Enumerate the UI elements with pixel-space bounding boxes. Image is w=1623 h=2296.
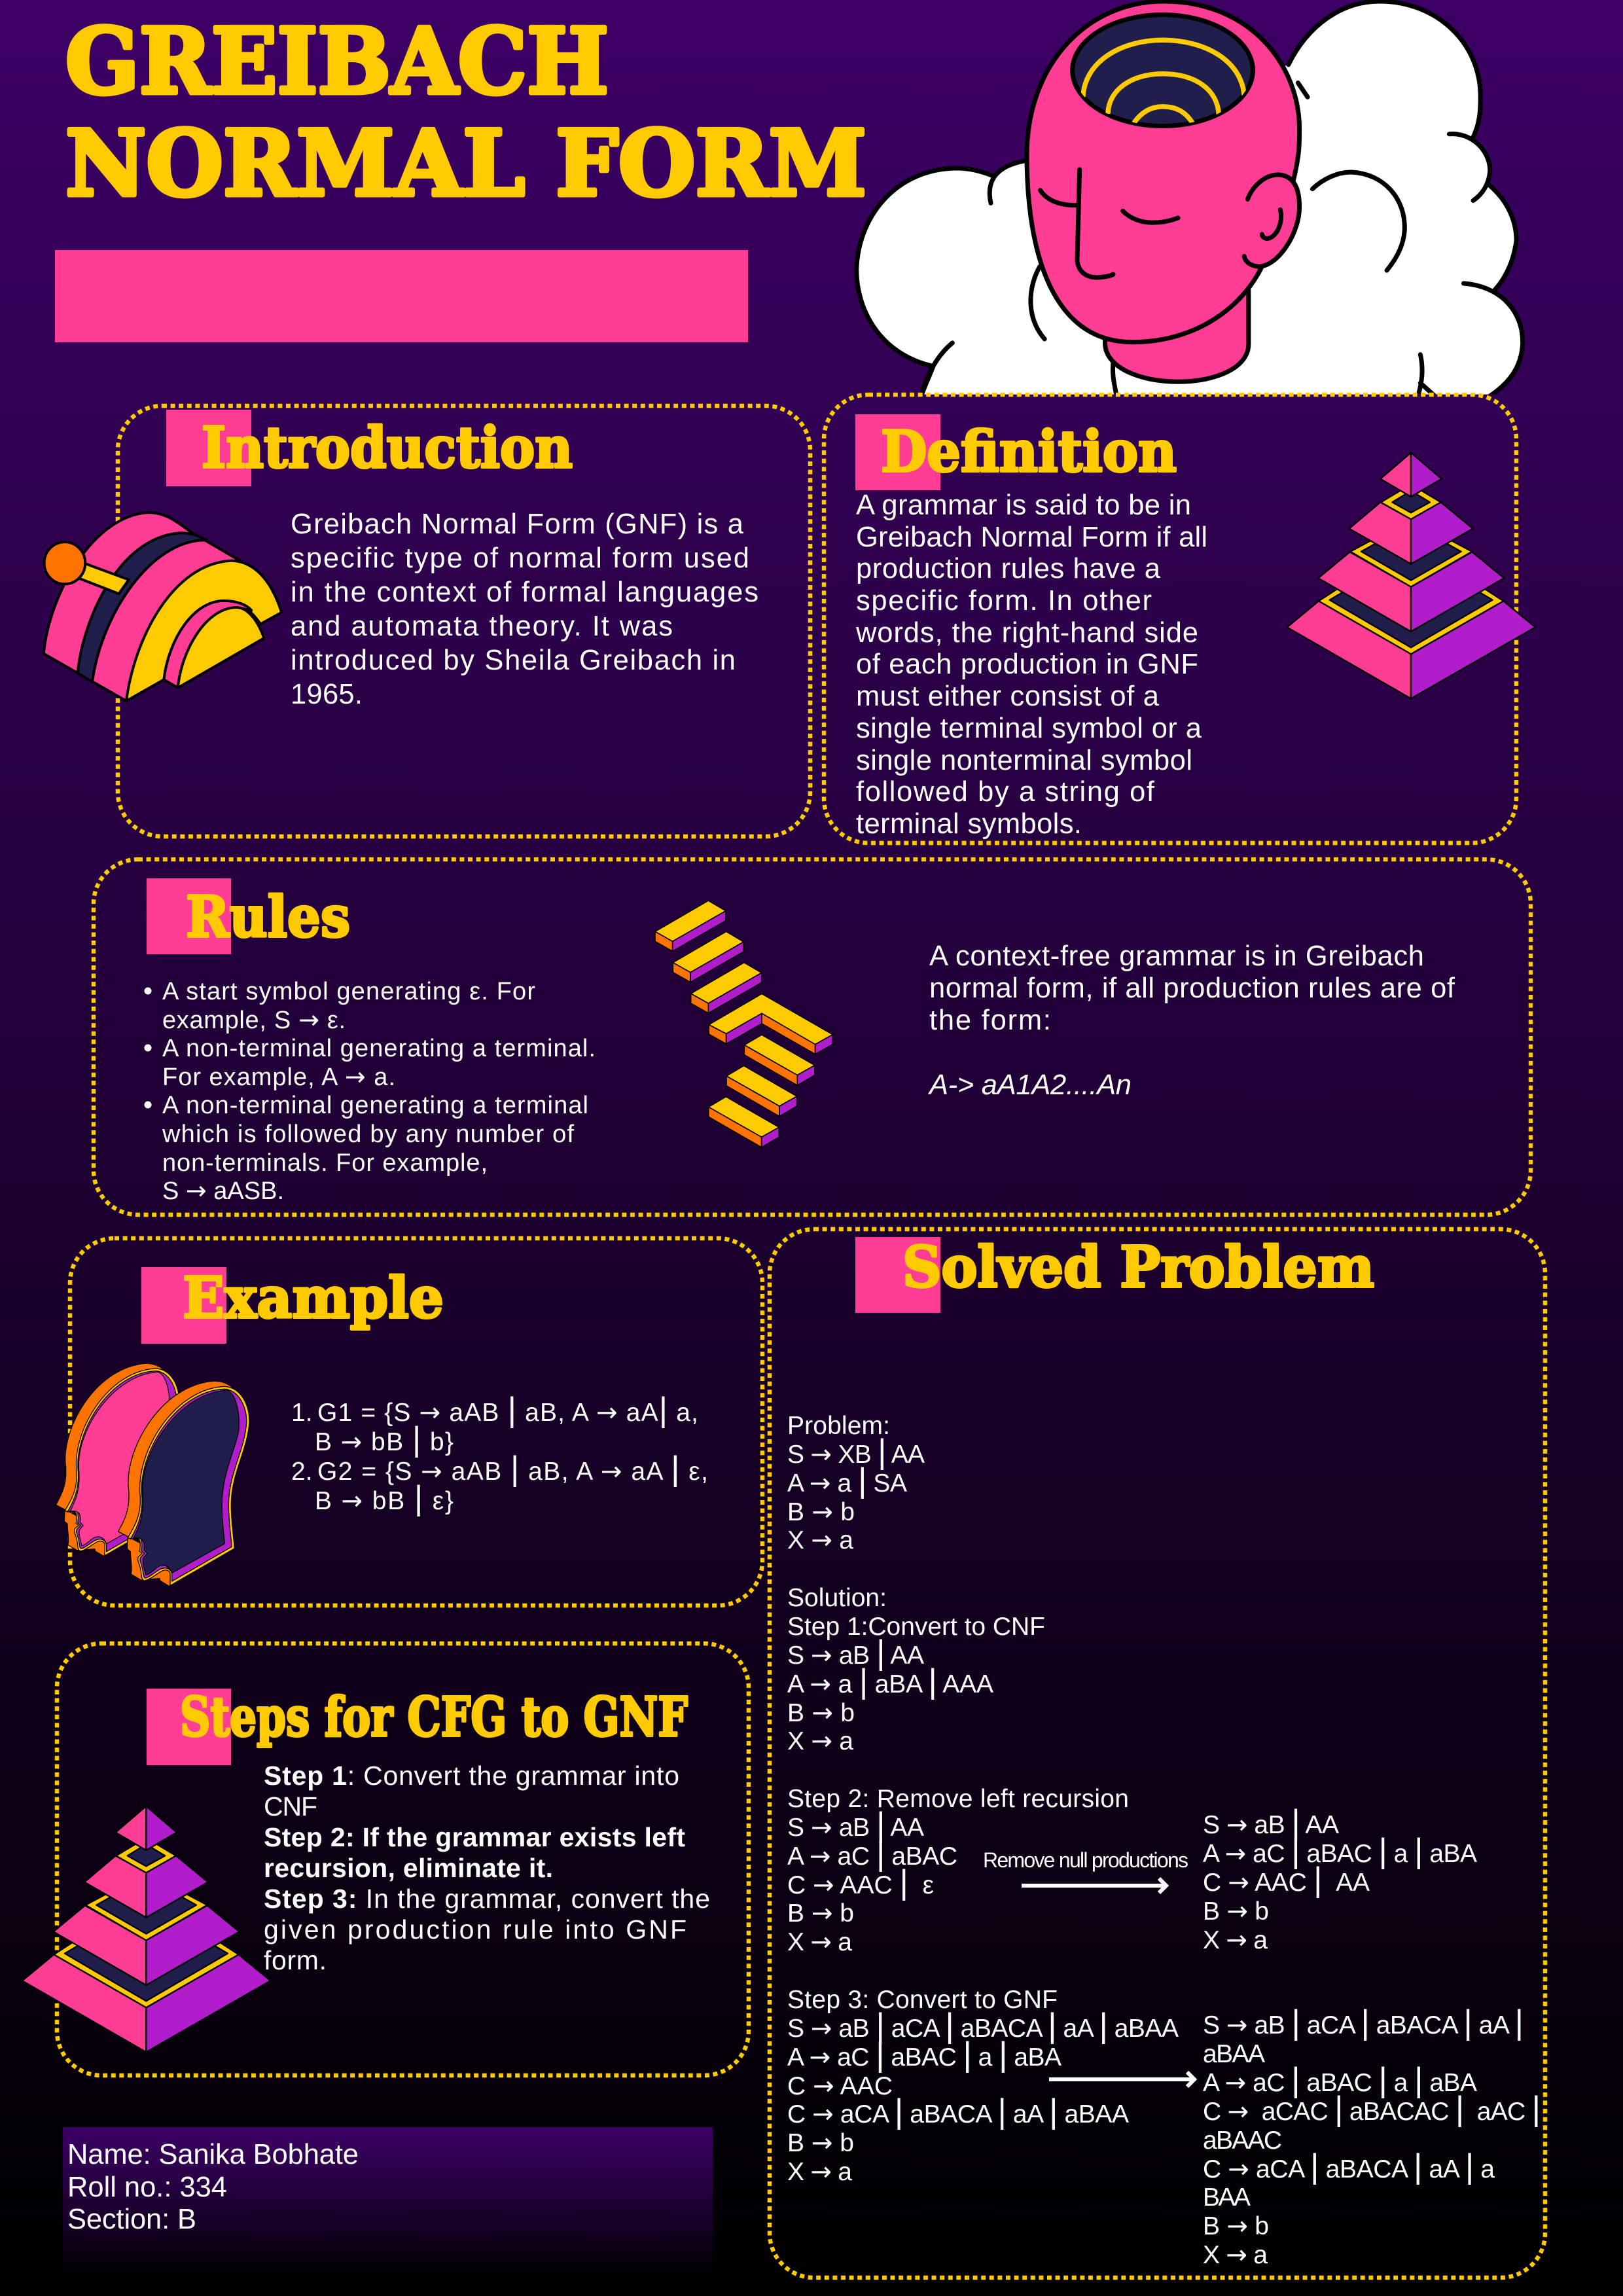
title: GREIBACH [65, 8, 609, 115]
steps text: given production rule into GNF [264, 1914, 687, 1945]
step 3 right: BAA [1203, 2183, 1251, 2212]
heading: introduction: Introduction [202, 415, 573, 481]
panel: definition [824, 395, 1535, 843]
step 3 right: aBAA [1203, 2040, 1265, 2068]
author text [67, 2139, 359, 2235]
step 3 left: X → a [787, 2157, 852, 2187]
example list: G2 = {S → aAB | aB, A → aA | ε, [317, 1449, 708, 1487]
introduction text: and automata theory. It was [291, 611, 673, 642]
icon: arch machine [44, 512, 281, 701]
rules bullet list: which is followed by any number of [162, 1121, 574, 1148]
step 3 right: C → aCAC | aBACAC | aAC | [1203, 2089, 1541, 2127]
definition text: words, the right-hand side [855, 617, 1198, 649]
problem statement and solution: Problem: [787, 1412, 890, 1440]
icon: isometric blocks arrow [655, 901, 832, 1147]
step 3 left: S → aB | aCA | aBACA | aA | aBAA [787, 2006, 1179, 2044]
steps text: form. [264, 1945, 327, 1975]
introduction text [291, 509, 758, 710]
rules bullet list: non-terminals. For example, [162, 1149, 488, 1177]
example list: G1 = {S → aAB | aB, A → aA| a, [317, 1390, 698, 1428]
definition text: A grammar is said to be in [856, 490, 1191, 521]
problem statement and solution: B → b [787, 1498, 855, 1527]
panel: rules [94, 859, 1531, 1215]
problem statement and solution [787, 1412, 1045, 1756]
definition text: of each production in GNF [856, 649, 1198, 680]
example list: 1. [291, 1399, 313, 1427]
step 2 left: S → aB | AA [787, 1805, 924, 1843]
heading: rules: Rules [186, 884, 350, 950]
author text: Name: Sanika Bobhate [67, 2139, 359, 2170]
step 3 right: C → aCA | aBACA | aA | a [1203, 2147, 1495, 2185]
problem statement and solution: A → a | SA [787, 1461, 907, 1499]
step 3 left: Step 3: Convert to GNF [787, 1986, 1058, 2014]
title [65, 8, 866, 217]
example list [291, 1390, 708, 1516]
example list: 2. [291, 1458, 313, 1486]
step 3 right: B → b [1203, 2212, 1269, 2241]
problem statement and solution: Solution: [787, 1584, 887, 1612]
definition text: must either consist of a [856, 681, 1160, 712]
step 3 right [1203, 2003, 1541, 2270]
arrow: step 2 [1022, 1878, 1166, 1893]
introduction text: in the context of formal languages [291, 577, 758, 608]
step 3 right: A → aC | aBAC | a | aBA [1203, 2060, 1477, 2098]
step 3 right: S → aB | aCA | aBACA | aA | [1203, 2003, 1524, 2041]
problem statement and solution: X → a [787, 1727, 853, 1756]
heading accent: rules [147, 878, 231, 954]
arrow label: Remove null productions [983, 1848, 1188, 1872]
heading accent: example [141, 1267, 226, 1344]
heading: steps for CFG to GNF: Steps for CFG to GNF [180, 1686, 688, 1749]
rules description: A context-free grammar is in Greibach [929, 941, 1424, 972]
step 2 left: A → aC | aBAC [787, 1834, 957, 1872]
definition text: specific form. In other [856, 585, 1152, 617]
rules description: A-> aA1A2....An [927, 1069, 1132, 1101]
problem statement and solution: S → aB | AA [787, 1633, 924, 1671]
definition text: terminal symbols. [856, 808, 1082, 840]
icon: pyramid [22, 1806, 270, 2052]
panel: author details [63, 2127, 713, 2274]
step 2 left: B → b [787, 1899, 854, 1928]
rules description: normal form, if all production rules are of [929, 973, 1455, 1004]
definition text: Greibach Normal Form if all [856, 522, 1207, 553]
example list: B → bB | ε} [315, 1479, 454, 1516]
introduction text: introduced by Sheila Greibach in [291, 645, 736, 676]
rules description: the form: [929, 1005, 1051, 1036]
author text: Section: B [67, 2204, 196, 2235]
rules description [927, 941, 1455, 1101]
step 2 left [787, 1785, 1129, 1957]
heading: solved problem: Solved Problem [902, 1234, 1374, 1300]
step 3 left: C → aCA | aBACA | aA | aBAA [787, 2092, 1129, 2130]
step 2 right: B → b [1203, 1897, 1269, 1926]
rules bullet list: example, S → ε. [162, 1005, 346, 1034]
step 3 right: aBAAC [1203, 2126, 1282, 2155]
definition text [855, 490, 1207, 840]
heading accent: definition [855, 414, 940, 490]
definition text: followed by a string of [856, 776, 1155, 808]
illustration: head in cloud [857, 1, 1523, 396]
rules bullet list: A non-terminal generating a terminal [162, 1092, 588, 1119]
rules bullet list: A start symbol generating ε. For [162, 978, 535, 1005]
step 3 right: X → a [1203, 2240, 1268, 2270]
icon: two heads [56, 1363, 249, 1587]
panel: example [56, 1238, 762, 1605]
introduction text: Greibach Normal Form (GNF) is a [291, 509, 744, 540]
author text: Roll no.: 334 [67, 2172, 227, 2203]
heading accent: introduction [166, 410, 251, 486]
definition text: production rules have a [856, 553, 1161, 584]
heading: definition: Definition [881, 419, 1177, 485]
step 2 right: C → AAC | AA [1203, 1860, 1370, 1898]
problem statement and solution: B → b [787, 1698, 855, 1728]
steps text: Step 2: If the grammar exists left [264, 1822, 685, 1852]
rules bullet list: A non-terminal generating a terminal. [162, 1035, 596, 1062]
step 2 right: A → aC | aBAC | a | aBA [1203, 1831, 1477, 1869]
example list: B → bB | b} [315, 1420, 454, 1458]
step 2 left: C → AAC | ε [787, 1863, 934, 1901]
problem statement and solution: A → a | aBA | AAA [787, 1662, 993, 1700]
introduction text: 1965. [291, 679, 363, 710]
heading accent: steps [147, 1689, 231, 1765]
heading accent: solved problem [855, 1237, 940, 1313]
definition text: single nonterminal symbol [856, 745, 1192, 776]
rules bullet list: For example, A → a. [162, 1062, 395, 1091]
panel: steps [22, 1643, 749, 2075]
step 3 left [787, 1986, 1179, 2187]
step 2 right [1203, 1803, 1477, 1955]
steps text: recursion, eliminate it. [264, 1853, 553, 1883]
panel: introduction [44, 406, 810, 836]
steps text: Step 3: In the grammar, convert the [264, 1884, 710, 1914]
step 2 right: X → a [1203, 1926, 1268, 1955]
title: NORMAL FORM [65, 110, 866, 217]
rules bullet list: S → aASB. [162, 1176, 284, 1205]
steps text: CNF [264, 1791, 317, 1821]
step 3 left: B → b [787, 2128, 854, 2158]
step 2 left: Step 2: Remove left recursion [787, 1785, 1129, 1813]
problem statement and solution: Step 1:Convert to CNF [787, 1613, 1045, 1641]
steps text [264, 1761, 710, 1975]
pink title bar [55, 250, 748, 342]
panel: solved problem [770, 1229, 1545, 2278]
icon: pyramid [1287, 453, 1535, 698]
step 3 left: C → AAC [787, 2072, 893, 2101]
steps text: Step 1: Convert the grammar into [264, 1761, 679, 1791]
introduction text: specific type of normal form used [291, 543, 749, 574]
heading: example: Example [183, 1265, 444, 1331]
step 2 right: S → aB | AA [1203, 1803, 1339, 1840]
problem statement and solution: X → a [787, 1526, 853, 1555]
definition text: single terminal symbol or a [856, 713, 1202, 744]
arrow: step 3 [1049, 2072, 1194, 2087]
problem statement and solution: S → XB | AA [787, 1432, 925, 1470]
rules bullet list [144, 978, 596, 1205]
step 2 left: X → a [787, 1928, 852, 1957]
step 3 left: A → aC | aBAC | a | aBA [787, 2035, 1061, 2073]
